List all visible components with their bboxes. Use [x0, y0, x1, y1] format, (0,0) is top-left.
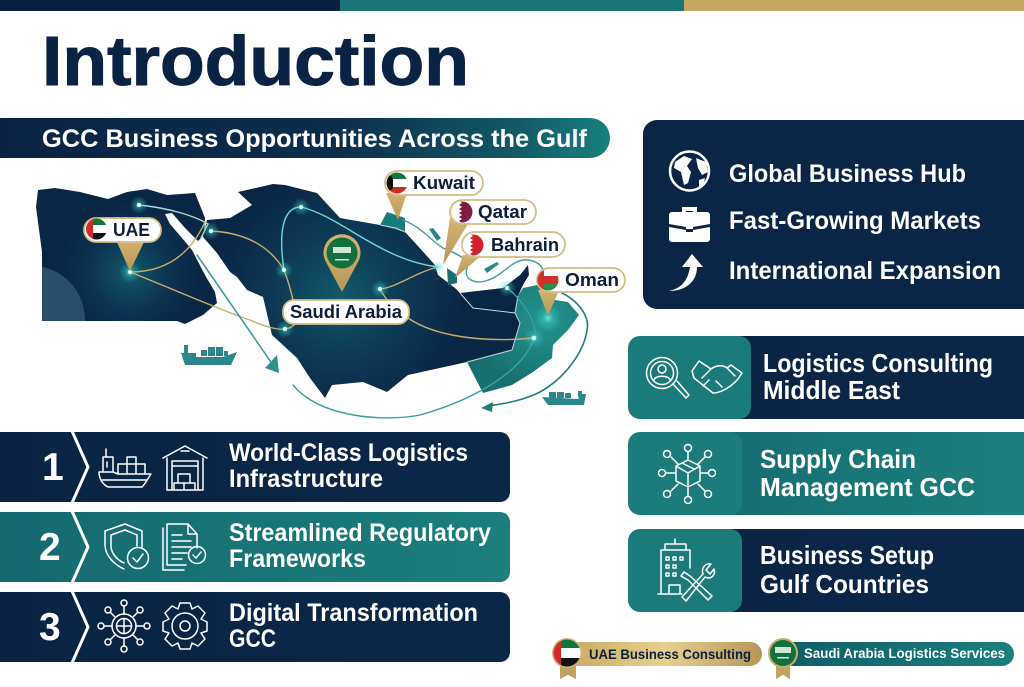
- bar 3: digital transformation: [0, 591, 510, 663]
- icon: briefcase: [669, 207, 710, 242]
- icon: ship: [99, 449, 151, 487]
- pin: UAE: [84, 218, 161, 271]
- panel: Business Setup: Gulf Countries: [760, 569, 929, 599]
- bar 3: digital transformation: GCC: [229, 625, 276, 653]
- pin: Saudi Arabia: Saudi Arabia: [290, 302, 403, 322]
- icon: globe: [670, 152, 709, 190]
- bar 1: logistics infrastructure: Infrastructure: [229, 465, 383, 493]
- bar 2: regulatory frameworks: Streamlined Regulatory: [229, 519, 491, 547]
- icon: magnifier and handshake: [646, 358, 742, 398]
- pin: UAE: UAE: [113, 220, 150, 240]
- panel: Business Setup: Business Setup: [760, 540, 934, 570]
- icon: document: [163, 524, 206, 570]
- icon: growth arrow: [669, 254, 703, 291]
- map of the Gulf region: [36, 171, 625, 418]
- bar 3: digital transformation: Digital Transformation: [229, 599, 478, 627]
- pin: Kuwait: [385, 171, 483, 220]
- heading banner: GCC Business Opportunities: GCC Business Opportunities Across the Gulf: [42, 125, 588, 153]
- pin: Qatar: Qatar: [478, 202, 527, 222]
- bar 2: regulatory frameworks: 2: [39, 526, 61, 569]
- panel: Supply Chain: [628, 432, 1024, 515]
- icon: building and tools: [658, 539, 714, 601]
- panel: highlights: Fast-Growing Markets: [729, 207, 981, 235]
- top colour strip: [0, 0, 1024, 11]
- bar 3: digital transformation: 3: [39, 606, 61, 649]
- icon: cargo ship east: [542, 391, 586, 405]
- sea and trade routes: [130, 205, 588, 418]
- panel: Supply Chain: Supply Chain: [760, 444, 916, 474]
- icon: cargo ship west: [181, 345, 237, 365]
- panel: highlights: Global Business Hub: [729, 160, 966, 188]
- panel: Logistics Consulting: [628, 336, 1024, 419]
- route nodes: [119, 196, 562, 348]
- bar 2: regulatory frameworks: Frameworks: [229, 545, 366, 573]
- panel: Business Setup: [628, 529, 1024, 612]
- icon: gear: [163, 603, 207, 649]
- bar 1: logistics infrastructure: [0, 431, 510, 503]
- panel: highlights: [643, 120, 1024, 309]
- badge: Saudi Arabia Logistics Services: Saudi Arabia Logistics Services: [804, 646, 1005, 661]
- bar 1: logistics infrastructure: 1: [42, 446, 64, 489]
- pin: Qatar: [443, 200, 536, 265]
- icon: warehouse: [163, 446, 207, 490]
- bar 2: regulatory frameworks: [0, 511, 510, 583]
- badge: UAE Business Consulting: [552, 638, 762, 679]
- heading banner: GCC Business Opportunities: [0, 118, 610, 158]
- icon: supply network: [658, 444, 716, 504]
- badge: UAE Business Consulting: UAE Business Consulting: [589, 646, 751, 662]
- panel: Supply Chain: Management GCC: [760, 472, 975, 502]
- panel: highlights: International Expansion: [729, 257, 1001, 285]
- pin: Oman: Oman: [565, 270, 619, 290]
- pin: Kuwait: Kuwait: [413, 173, 475, 193]
- pin: Oman: [537, 268, 625, 316]
- pin: Saudi Arabia: [283, 234, 409, 324]
- land shapes: [36, 184, 579, 398]
- panel: Logistics Consulting: Logistics Consulting: [763, 348, 993, 378]
- icon: digital network: [98, 600, 150, 652]
- pin: Bahrain: [455, 232, 565, 278]
- icon: gulf vessels: [429, 228, 499, 273]
- badge: Saudi Arabia Logistics Services: [768, 638, 1014, 679]
- bar 1: logistics infrastructure: World-Class Logistics: [229, 439, 468, 467]
- panel: Logistics Consulting: Middle East: [763, 375, 900, 405]
- icon: shield: [105, 524, 148, 569]
- pin: Bahrain: Bahrain: [491, 235, 559, 255]
- title: Introduction: [42, 22, 469, 100]
